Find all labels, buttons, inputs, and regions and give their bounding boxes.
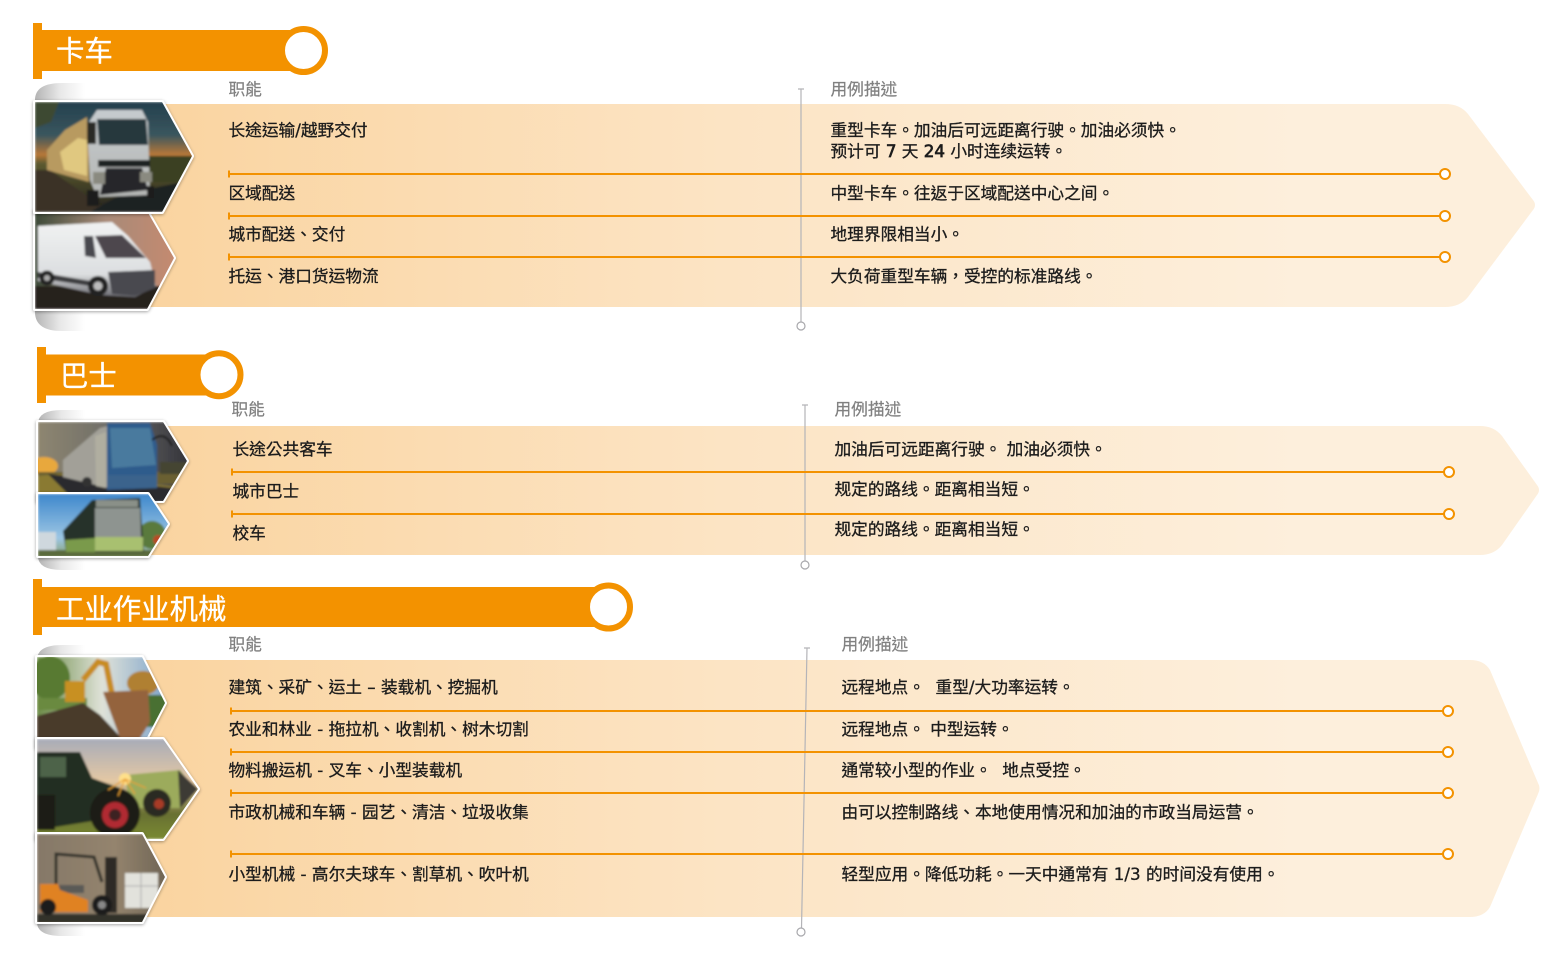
row: intercity bus: 加油后可远距离行驶。 加油必须快。 [834, 439, 1107, 459]
photo: van [35, 211, 175, 309]
section: industrial machinery [30, 579, 1540, 936]
use cases: column heading: 用例描述 [834, 399, 902, 419]
row: agriculture: 农业和林业 - 拖拉机、收割机、树木切割 [228, 719, 529, 739]
row: school bus: 规定的路线。距离相当短。 [834, 519, 1035, 539]
photo: city bus [38, 494, 170, 557]
row: construction: 远程地点。 重型/大功率运转。 [842, 677, 1075, 697]
photo: excavator [30, 656, 167, 747]
photo: coach [30, 422, 190, 502]
row: small machinery [228, 864, 1279, 884]
section: buses [30, 347, 1539, 570]
row: drayage [228, 266, 1098, 286]
row: school bus: 校车 [232, 523, 266, 543]
row: regional: 中型卡车。往返于区域配送中心之间。 [830, 183, 1114, 203]
row: intercity bus: 长途公共客车 [232, 439, 333, 459]
row: drayage: 大负荷重型车辆，受控的标准路线。 [830, 266, 1098, 286]
row: regional [228, 183, 1114, 203]
row: construction: 建筑、采矿、运土 – 装载机、挖掘机 [228, 677, 498, 697]
side shadow curve [37, 645, 85, 936]
row: intercity bus [232, 439, 1107, 459]
row: municipal [228, 802, 1259, 822]
row: municipal: 市政机械和车辆 - 园艺、清洁、垃圾收集 [228, 802, 529, 822]
vertical divider [797, 89, 805, 330]
use cases: column heading: 用例描述 [842, 634, 909, 654]
functions: column heading: 职能 [228, 79, 262, 99]
vertical divider [797, 648, 810, 936]
row: long haul: 长途运输/越野交付 [228, 120, 368, 140]
row: long haul: 预计可 7 天 24 小时连续运转。 [830, 141, 1067, 161]
header: truck: 卡车 [56, 35, 113, 68]
row dividers [231, 706, 1453, 859]
vertical divider [801, 405, 809, 569]
arrow band [130, 426, 1539, 555]
row: long haul: 重型卡车。加油后可远距离行驶。加油必须快。 [830, 120, 1181, 140]
functions: column heading: 职能 [228, 634, 262, 654]
row: agriculture [228, 719, 1014, 739]
row: agriculture: 远程地点。 中型运转。 [842, 719, 1014, 739]
header: machinery [33, 579, 630, 635]
row: municipal: 由可以控制路线、本地使用情况和加油的市政当局运营。 [842, 802, 1259, 822]
section: trucks [33, 23, 1535, 331]
side shadow curve [38, 410, 85, 570]
row: regional: 区域配送 [228, 183, 296, 203]
arrow band [130, 104, 1535, 307]
row: city bus [232, 479, 1035, 501]
row: small machinery: 小型机械 - 高尔夫球车、割草机、吹叶机 [228, 864, 529, 884]
row: drayage: 托运、港口货运物流 [228, 266, 379, 286]
row: small machinery: 轻型应用。降低功耗。一天中通常有 1/3 的时间没有使用。 [842, 864, 1279, 884]
row dividers [232, 467, 1454, 519]
row: urban [228, 224, 964, 244]
header: truck [33, 23, 325, 79]
row: material handling: 物料搬运机 - 叉车、小型装载机 [228, 760, 462, 780]
header: bus: 巴士 [60, 360, 117, 393]
header: machinery: 工业作业机械 [56, 593, 226, 626]
photo: truck [35, 102, 194, 212]
functions: column heading: 职能 [232, 399, 265, 419]
photo: tractor [37, 739, 199, 839]
row dividers [229, 169, 1450, 262]
row: long haul [228, 120, 1181, 161]
row: construction [228, 677, 1075, 697]
use cases: column heading: 用例描述 [830, 79, 898, 99]
row: material handling [228, 760, 1086, 780]
row: city bus: 规定的路线。距离相当短。 [834, 479, 1035, 499]
arrow band [130, 660, 1540, 917]
photo: forklift [37, 834, 167, 924]
row: school bus [232, 519, 1035, 543]
row: material handling: 通常较小型的作业。 地点受控。 [842, 760, 1086, 780]
header: bus [37, 347, 240, 403]
row: urban: 城市配送、交付 [228, 224, 345, 244]
row: city bus: 城市巴士 [232, 481, 299, 501]
row: urban: 地理界限相当小。 [830, 224, 964, 244]
side shadow curve [35, 83, 85, 331]
